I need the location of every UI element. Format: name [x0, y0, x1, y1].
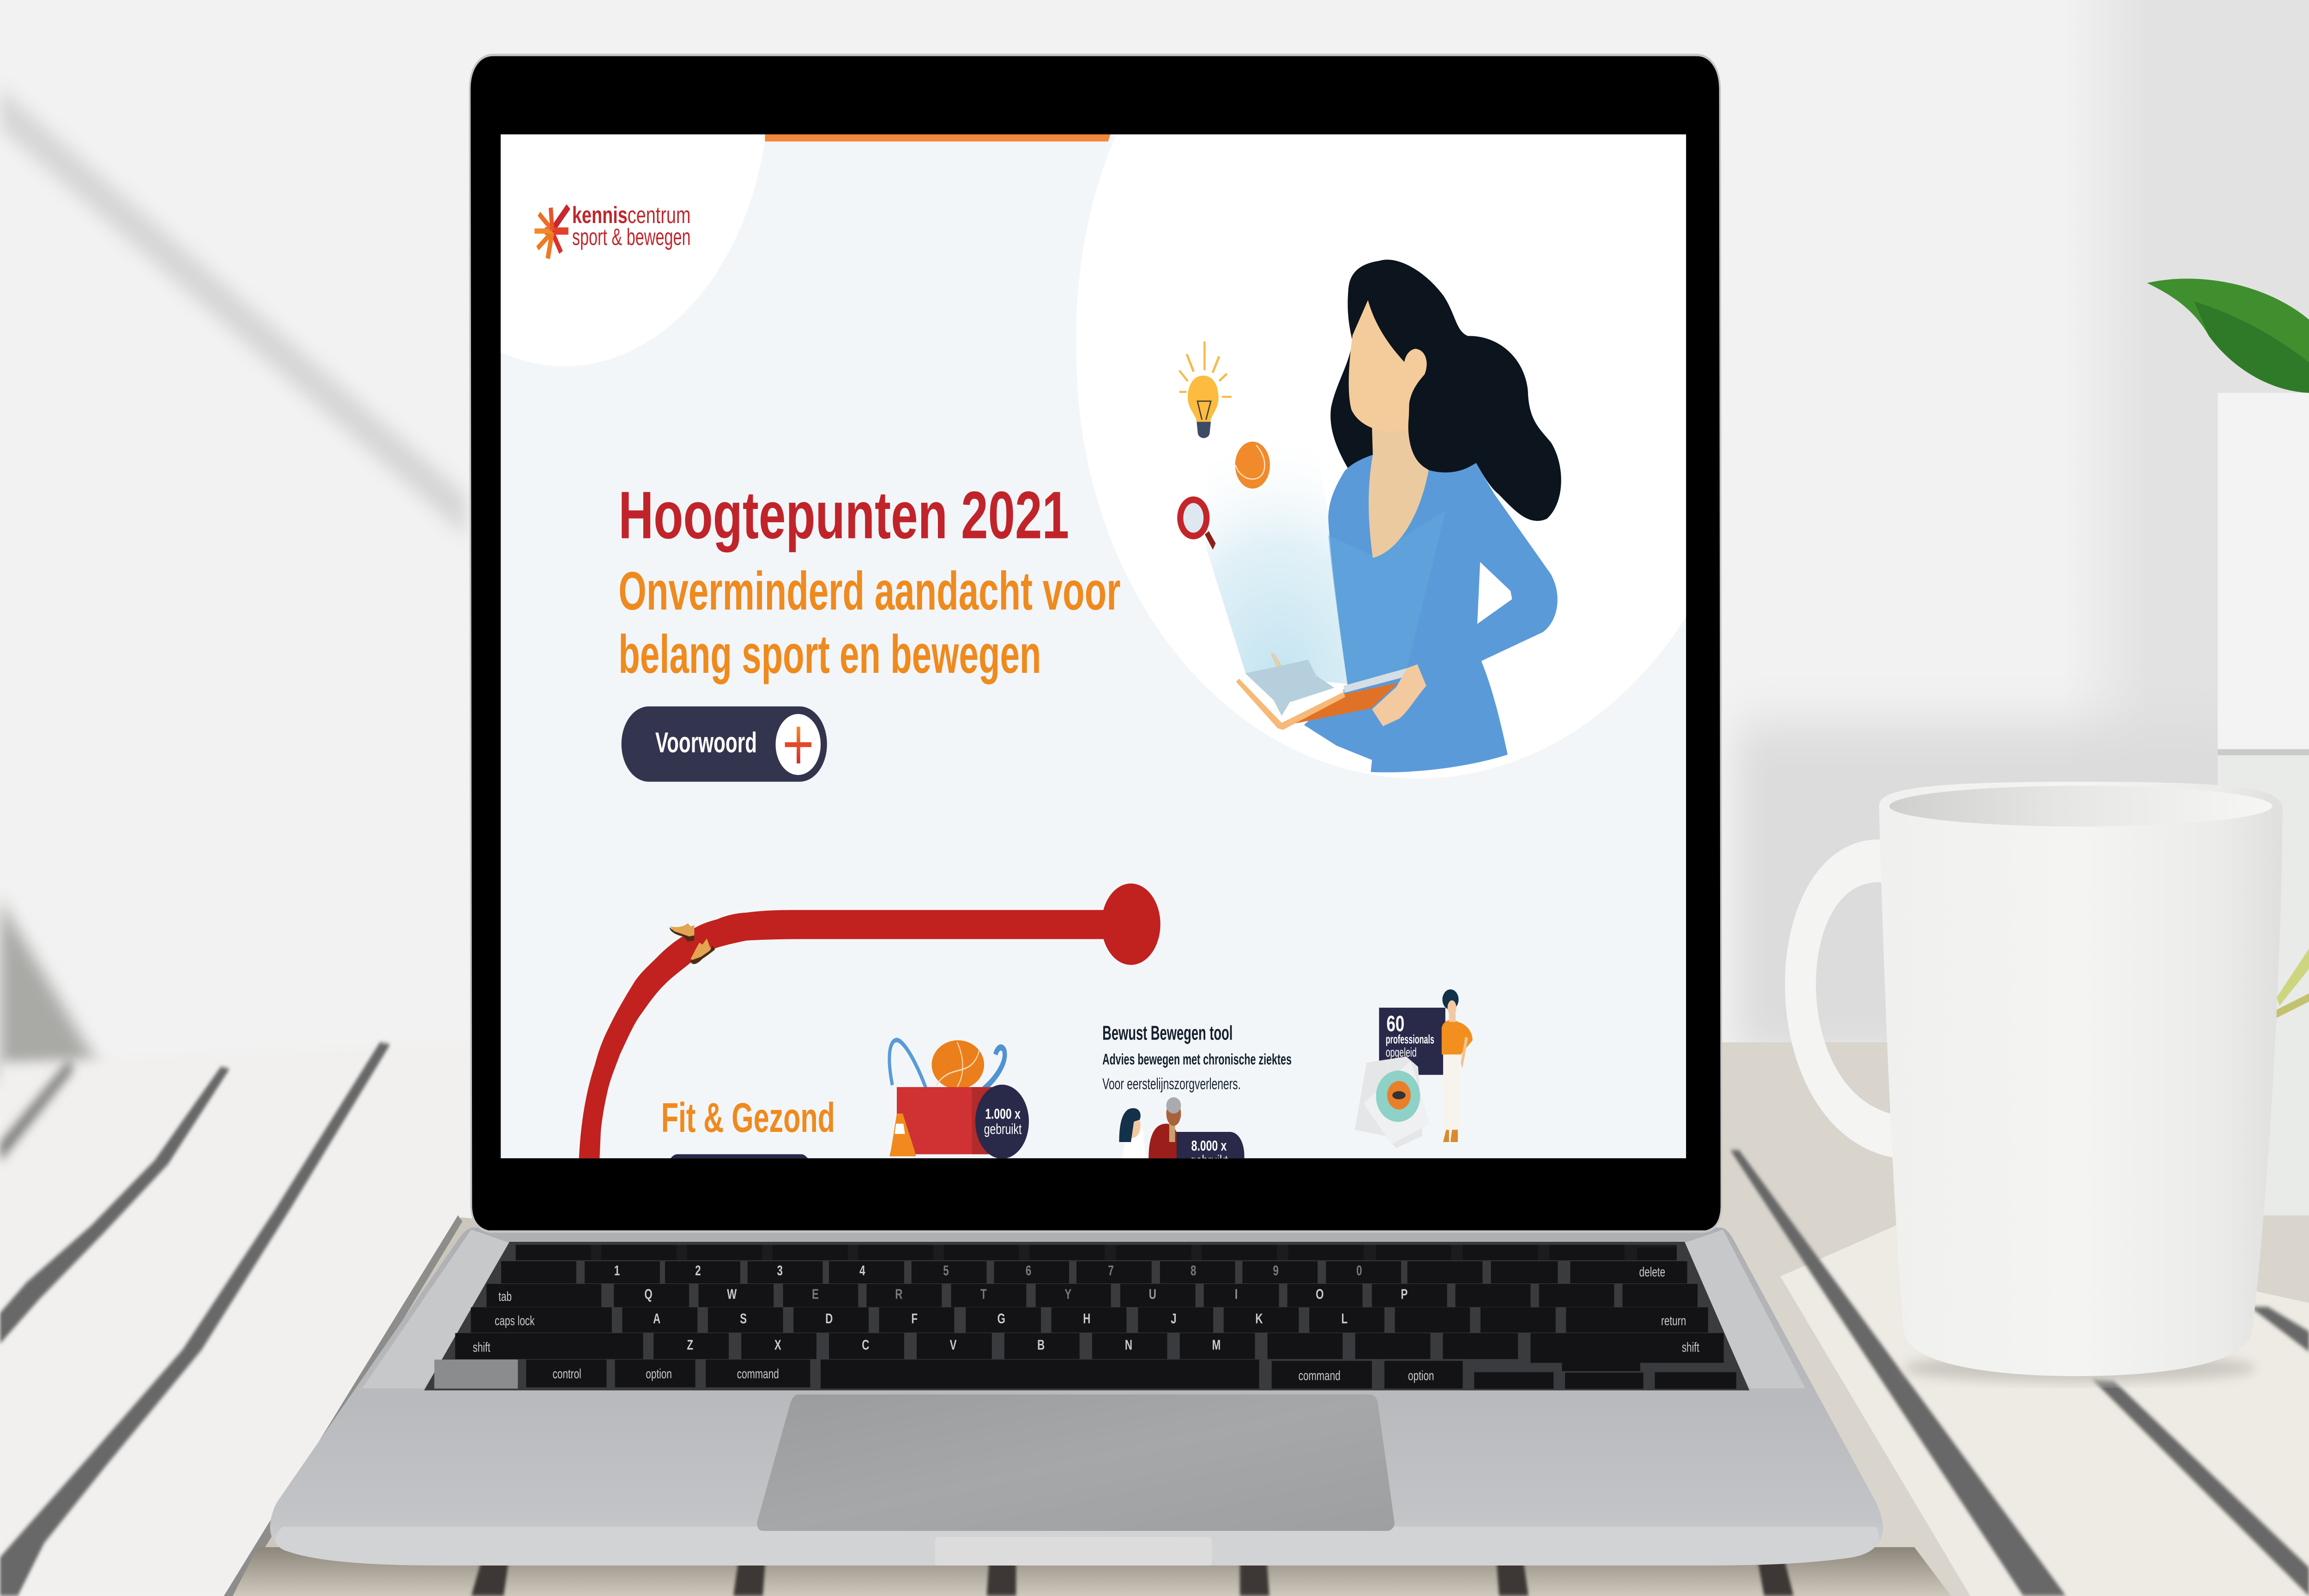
stat: 1.000 x gebruikt: 1.000 x [985, 1106, 1021, 1122]
red route line [579, 883, 1161, 1164]
key labels: X [774, 1337, 781, 1353]
white circle behind illustration [1076, 134, 1686, 779]
stripes on the cloth [0, 1042, 2309, 1596]
key labels: Z [687, 1337, 693, 1353]
front edge of the base [275, 1527, 1879, 1566]
woman body [1304, 455, 1558, 772]
key labels: 5 [943, 1263, 949, 1278]
woman neck and chest [1369, 428, 1429, 558]
button: Voorwoord: Voorwoord [655, 727, 757, 759]
key labels: D [825, 1311, 833, 1326]
orange top bar [765, 134, 1110, 141]
stat box: 8.000 x gebruikt: 8.000 x [1191, 1137, 1227, 1154]
book page flip [1245, 660, 1334, 716]
subtitle [618, 561, 1121, 684]
bookmark [1271, 653, 1281, 667]
standing woman [1442, 989, 1473, 1142]
patient [1148, 1097, 1181, 1158]
woman hair [1330, 260, 1561, 521]
section: Fit & Gezond heading: Fit & Gezond [661, 1094, 835, 1141]
key labels: caps lock [495, 1314, 535, 1329]
key labels: G [997, 1311, 1005, 1326]
key labels: M [1212, 1337, 1221, 1353]
section: Bewust Bewegen tool: Bewust Bewegen tool [1102, 1022, 1233, 1044]
screen [501, 134, 1686, 1183]
subtitle: Onverminderd aandacht voor [618, 561, 1121, 621]
stat box: 8.000 x gebruikt [1177, 1132, 1245, 1171]
key labels: O [1316, 1286, 1324, 1302]
icon: running shoes [670, 923, 715, 964]
laptop [270, 55, 1883, 1566]
key labels: option [646, 1366, 672, 1381]
vase with plant [2147, 278, 2309, 1215]
icon: light bulb [1179, 341, 1232, 438]
icon: magnifying glass [1177, 496, 1215, 550]
key labels: F [911, 1311, 918, 1326]
key labels: W [727, 1286, 737, 1302]
fabric under the front edge of the laptop [233, 1547, 1951, 1596]
background: wall [0, 0, 2309, 1079]
lid bezel [470, 55, 1722, 1232]
key labels: I [1235, 1286, 1238, 1302]
key labels: K [1255, 1311, 1263, 1326]
basket ball [932, 1040, 984, 1089]
key labels: option [1408, 1369, 1434, 1384]
icon: leaf [2147, 278, 2309, 393]
basket ribbon left [889, 1040, 926, 1089]
key labels: P [1401, 1286, 1408, 1302]
logo [535, 202, 691, 259]
key labels: A [653, 1311, 660, 1326]
trackpad [757, 1395, 1395, 1531]
illustration: doctor and patient [1119, 1097, 1245, 1171]
stat: 1.000 x gebruikt [984, 1106, 1022, 1137]
key labels: R [895, 1286, 902, 1302]
key labels: command [1299, 1369, 1341, 1384]
mug body [1879, 782, 2283, 1376]
key labels: C [862, 1337, 869, 1353]
posters [1355, 1057, 1430, 1148]
stat box: 60 professionals opgeleid: professionals [1386, 1033, 1434, 1046]
woman hand [1372, 664, 1426, 726]
traffic cone [889, 1113, 916, 1156]
logo: sport & bewegen [572, 224, 691, 250]
basket ribbon right [984, 1047, 1005, 1089]
icon: logo star [535, 206, 568, 259]
woman face [1349, 300, 1427, 432]
mug shadow on the cloth [1903, 1354, 2256, 1382]
button peeking at fold [669, 1154, 810, 1183]
book rim [1236, 679, 1345, 730]
button: Voorwoord [622, 707, 827, 782]
icon: tennis ball [1235, 441, 1270, 489]
key labels: shift [1682, 1340, 1699, 1355]
key labels: Y [1064, 1286, 1071, 1302]
book cover grey [1344, 668, 1407, 693]
key labels: control [553, 1366, 581, 1381]
key labels: 0 [1356, 1263, 1362, 1278]
key labels: B [1037, 1337, 1045, 1353]
dark stat circle [975, 1085, 1029, 1159]
icon: sports basket [889, 1040, 1029, 1159]
key labels: 4 [859, 1263, 865, 1278]
stat: 1.000 x gebruikt: gebruikt [984, 1121, 1022, 1137]
stat box: 60 professionals opgeleid [1379, 1008, 1445, 1075]
section: Bewust Bewegen tool [1102, 1022, 1292, 1093]
subtitle: belang sport en bewegen [618, 624, 1041, 684]
key labels: S [740, 1311, 747, 1326]
illustration: woman with posters [1355, 989, 1473, 1148]
key labels: tab [498, 1289, 512, 1304]
key labels: 9 [1273, 1263, 1279, 1278]
keyboard [424, 1242, 1749, 1390]
key labels: L [1342, 1311, 1348, 1326]
stat box: 8.000 x gebruikt: gebruikt [1190, 1152, 1228, 1169]
speaker grille right [1682, 1230, 1805, 1388]
section: Bewust Bewegen tool: Voor eerstelijnszorgverleners. [1102, 1076, 1241, 1093]
key labels: V [950, 1337, 957, 1353]
key labels: N [1125, 1337, 1132, 1353]
mug handle [1801, 861, 1909, 1138]
key labels: return [1661, 1314, 1686, 1329]
basket box [897, 1087, 992, 1154]
key labels: T [980, 1286, 987, 1302]
stat box: 60 professionals opgeleid: opgeleid [1386, 1046, 1417, 1060]
laptop base [270, 1227, 1883, 1566]
doctor [1119, 1108, 1146, 1158]
book pages [1237, 676, 1344, 727]
speaker grille left [362, 1230, 513, 1388]
key labels: shift [473, 1340, 490, 1355]
key labels: E [812, 1286, 819, 1302]
route end dot [1101, 883, 1161, 965]
screen background [501, 134, 1686, 1158]
key labels: H [1083, 1311, 1090, 1326]
arm gap [1477, 562, 1512, 624]
glass vase [2218, 393, 2309, 1215]
mug opening [1889, 786, 2272, 827]
key labels: 1 [614, 1263, 620, 1278]
book cover orange [1284, 683, 1398, 726]
stat box: 60 professionals opgeleid: 60 [1386, 1011, 1404, 1036]
coffee mug [1801, 782, 2283, 1382]
title: Hoogtepunten 2021 [618, 478, 1069, 552]
key labels: 8 [1191, 1263, 1196, 1278]
woman right hair strand [1408, 375, 1430, 470]
illustration: woman reading a book [1177, 260, 1561, 772]
background: table and cloth [0, 1042, 2309, 1596]
key labels: U [1149, 1286, 1156, 1302]
key labels: 3 [777, 1263, 783, 1278]
logo wordmark: kennis centrum [572, 202, 691, 229]
key labels: 2 [695, 1263, 701, 1278]
key labels: 6 [1026, 1263, 1031, 1278]
key labels: Q [644, 1286, 653, 1302]
key labels: command [737, 1366, 779, 1381]
lighter dress panel [1328, 510, 1446, 686]
white circle top left [501, 134, 766, 366]
section: Bewust Bewegen tool: Advies bewegen met chronische ziektes [1102, 1051, 1292, 1068]
hinge notch [935, 1537, 1212, 1566]
light glow from book [1206, 432, 1348, 684]
key labels [473, 1263, 1699, 1384]
key labels: delete [1639, 1265, 1665, 1280]
key labels: J [1171, 1311, 1177, 1326]
key labels: 7 [1108, 1263, 1114, 1278]
